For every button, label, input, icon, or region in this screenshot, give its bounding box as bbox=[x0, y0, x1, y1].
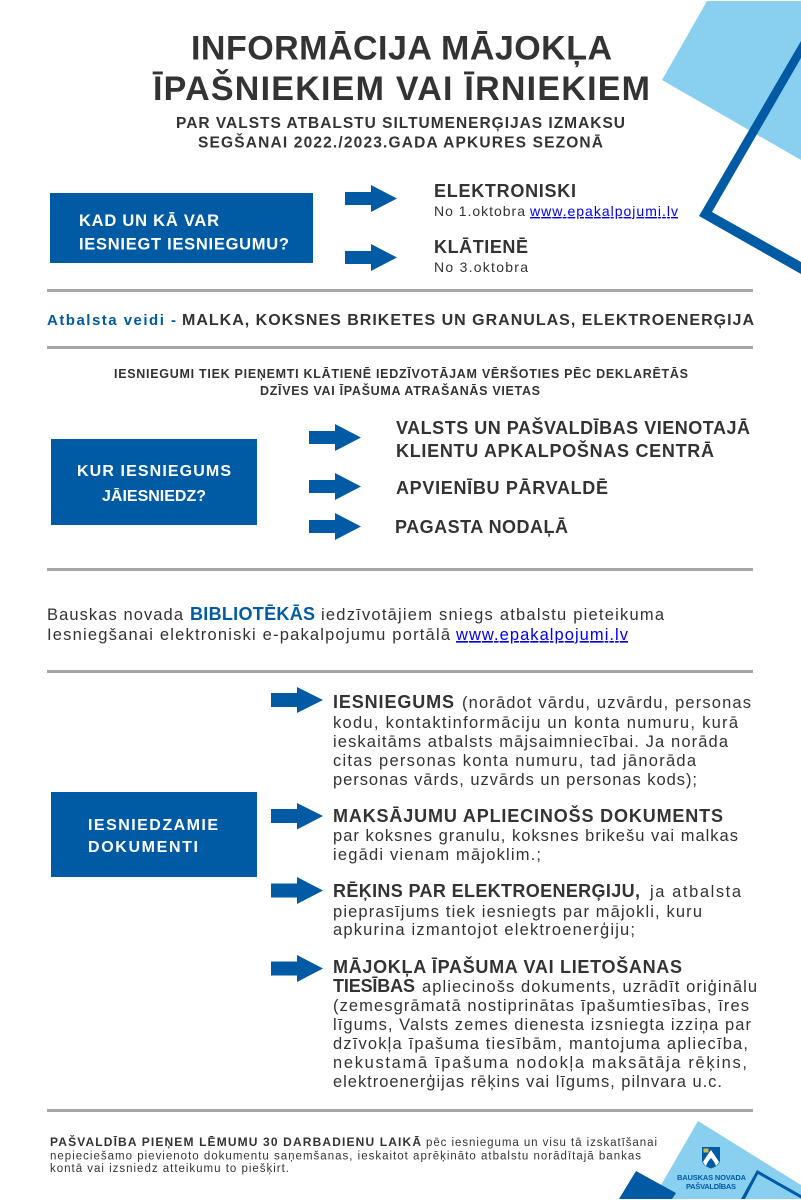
option: in person: No 3.oktobra bbox=[434, 259, 528, 275]
logo: Bauskas novada pašvaldības bbox=[677, 1147, 747, 1191]
option: electronic: No 1.oktobra bbox=[434, 203, 525, 219]
document: payment proof: MAKSĀJUMU APLIECINOŠS DOKUMENTS bbox=[333, 805, 723, 826]
document: application bbox=[333, 692, 751, 789]
document: payment proof bbox=[333, 805, 738, 864]
place: one-stop centre: VALSTS UN PAŠVALDĪBAS VIENOTAJĀ bbox=[396, 417, 750, 438]
document: application: kodu, kontaktinformāciju un konta numuru, kurā bbox=[333, 714, 739, 732]
decision note: pēc iesnieguma un visu tā izskatīšanai bbox=[426, 1137, 657, 1149]
panel: when and how to apply bbox=[50, 193, 313, 263]
document: ownership rights: dzīvokļa īpašuma tiesībām, mantojuma apliecība, bbox=[333, 1035, 748, 1053]
place: administration: APVIENĪBU PĀRVALDĒ bbox=[396, 478, 608, 498]
logo: Bauskas novada pašvaldības: BAUSKAS NOVADA bbox=[677, 1173, 747, 1182]
panel: required documents: IESNIEDZAMIE bbox=[88, 817, 218, 834]
libraries text: Iesniegšanai elektroniski e-pakalpojumu portālā bbox=[47, 626, 451, 644]
title bbox=[152, 30, 650, 108]
decoration: bottom right shapes bbox=[619, 1121, 801, 1199]
panel: where to submit: KUR IESNIEGUMS bbox=[77, 463, 231, 480]
place: one-stop centre: KLIENTU APKALPOŠNAS CENTRĀ bbox=[396, 440, 714, 461]
document: ownership rights: nekustamā īpašuma nodokļa maksātāja rēķins, bbox=[333, 1054, 747, 1072]
document: electricity bill: pieprasījums tiek iesniegts par mājokli, kuru bbox=[333, 903, 702, 921]
arrow bbox=[271, 877, 323, 904]
arrow bbox=[309, 513, 361, 540]
support types: MALKA, KOKSNES BRIKETES UN GRANULAS, ELEKTROENERĢIJA bbox=[182, 312, 754, 329]
document: electricity bill: apkurina izmantojot elektroenerģiju; bbox=[333, 921, 635, 939]
support types: Atbalsta veidi - bbox=[47, 312, 176, 329]
notice text bbox=[114, 366, 688, 398]
libraries text: iedzīvotājiem sniegs atbalstu pieteikuma bbox=[321, 606, 665, 624]
subtitle bbox=[176, 115, 625, 152]
decision note: nepieciešamo pievienoto dokumentu saņemšanas, ieskaitot aprēķināto atbalstu norādītajā bankas bbox=[50, 1150, 641, 1162]
document: application: citas personas konta numuru, tad jānorāda bbox=[333, 752, 697, 770]
document: application: IESNIEGUMS bbox=[333, 692, 454, 712]
notice text: DZĪVES VAI ĪPAŠUMA ATRAŠANĀS VIETAS bbox=[260, 383, 540, 398]
subtitle: PAR VALSTS ATBALSTU SILTUMENERĢIJAS IZMAKSU bbox=[176, 115, 625, 132]
libraries text bbox=[47, 604, 665, 644]
panel: required documents: DOKUMENTI bbox=[88, 839, 198, 856]
document: application: ieskaitāms atbalsts mājsaimniecībai. Ja norāda bbox=[333, 733, 729, 751]
panel: where to submit: JĀIESNIEDZ? bbox=[102, 486, 206, 505]
place: parish office: PAGASTA NODAĻĀ bbox=[395, 517, 568, 537]
document: ownership rights bbox=[333, 956, 757, 1091]
libraries text: www.epakalpojumi.lv bbox=[455, 626, 629, 644]
title: INFORMĀCIJA MĀJOKĻA bbox=[191, 30, 612, 68]
decision note: PAŠVALDĪBA PIEŅEM LĒMUMU 30 DARBADIENU LAIKĀ bbox=[50, 1134, 421, 1149]
panel: when and how to apply: KAD UN KĀ VAR bbox=[79, 211, 219, 230]
panel: where to submit bbox=[51, 439, 257, 525]
decision note: kontā vai izsniedz atteikumu to piešķirt. bbox=[50, 1163, 289, 1175]
option: in person: KLĀTIENĒ bbox=[434, 237, 528, 257]
place: one-stop centre bbox=[396, 417, 750, 461]
document: electricity bill: ja atbalsta bbox=[649, 883, 742, 901]
document: payment proof: iegādi vienam mājoklim.; bbox=[333, 846, 541, 864]
document: ownership rights: (zemesgrāmatā nostiprinātas īpašumtiesības, īres bbox=[333, 997, 749, 1015]
arrow bbox=[309, 424, 361, 451]
decision note bbox=[50, 1134, 657, 1175]
arrow bbox=[271, 955, 323, 982]
document: ownership rights: apliecinošs dokuments, uzrādīt oriģinālu bbox=[422, 978, 757, 996]
arrow bbox=[345, 185, 397, 212]
document: electricity bill bbox=[333, 881, 742, 939]
document: ownership rights: līgums, Valsts zemes dienesta izsniegta izziņa par bbox=[333, 1016, 752, 1034]
document: ownership rights: MĀJOKĻA ĪPAŠUMA VAI LIETOŠANAS bbox=[333, 956, 682, 977]
panel: when and how to apply: IESNIEGT IESNIEGUMU? bbox=[79, 236, 289, 254]
logo: Bauskas novada pašvaldības: PAŠVALDĪBAS bbox=[686, 1182, 736, 1191]
option: in person bbox=[434, 237, 528, 275]
document: payment proof: par koksnes granulu, koksnes brikešu vai malkas bbox=[333, 827, 738, 845]
decoration: top right shapes bbox=[662, 1, 801, 274]
libraries text: BIBLIOTĒKĀS bbox=[190, 604, 315, 624]
panel: required documents bbox=[51, 792, 257, 877]
document: application: (norādot vārdu, uzvārdu, personas bbox=[462, 694, 751, 712]
option: electronic bbox=[434, 181, 678, 219]
notice text: IESNIEGUMI TIEK PIEŅEMTI KLĀTIENĒ IEDZĪVOTĀJAM VĒRŠOTIES PĒC DEKLARĒTĀS bbox=[114, 366, 688, 381]
document: ownership rights: elektroenerģijas rēķins vai līgums, pilnvara u.c. bbox=[333, 1073, 722, 1091]
option: electronic: www.epakalpojumi.lv bbox=[529, 203, 678, 219]
document: application: personas vārds, uzvārds un personas kods); bbox=[333, 771, 697, 789]
arrow bbox=[309, 473, 361, 500]
option: electronic: ELEKTRONISKI bbox=[434, 181, 576, 201]
title: ĪPAŠNIEKIEM VAI ĪRNIEKIEM bbox=[152, 69, 650, 108]
document: ownership rights: TIESĪBAS bbox=[333, 976, 415, 996]
arrow bbox=[345, 244, 397, 271]
arrow bbox=[271, 803, 323, 830]
subtitle: SEGŠANAI 2022./2023.GADA APKURES SEZONĀ bbox=[198, 134, 603, 152]
libraries text: Bauskas novada bbox=[47, 606, 184, 624]
arrow bbox=[271, 687, 323, 713]
document: electricity bill: RĒĶINS PAR ELEKTROENERĢIJU, bbox=[333, 881, 640, 901]
